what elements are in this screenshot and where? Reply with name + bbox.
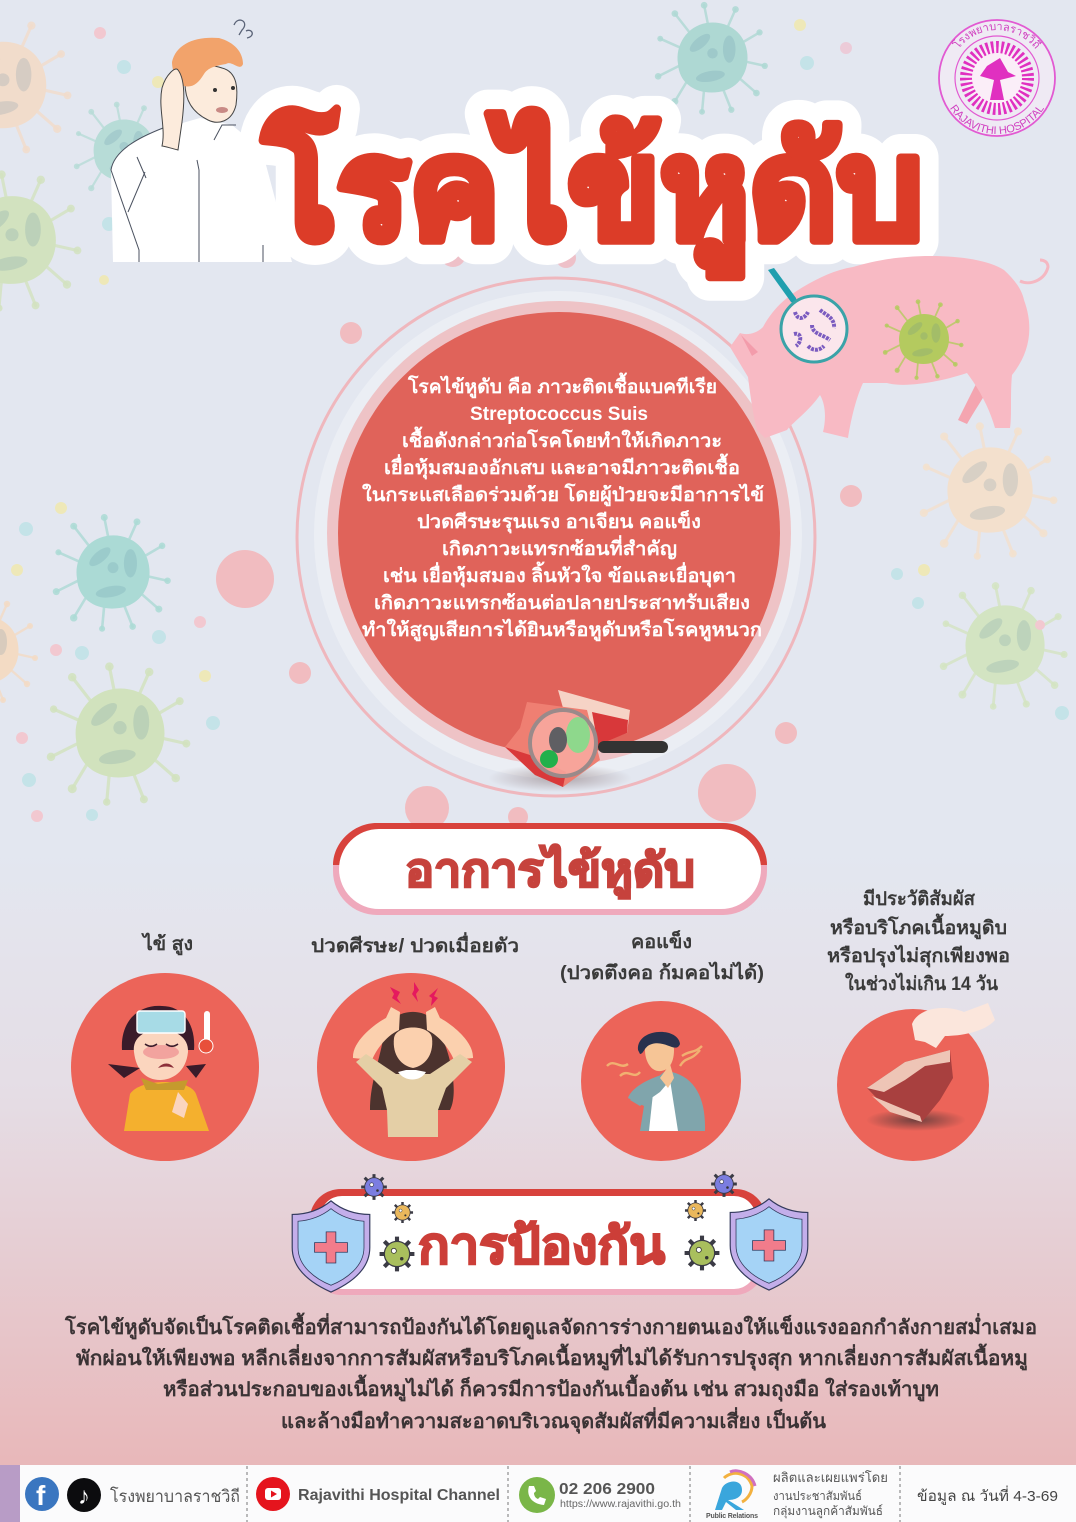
prevention paragraph: และล้างมือทำความสะอาดบริเวณจุดสัมผัสที่มีความเสี่ยง เป็นต้น: [281, 1406, 826, 1434]
footer: channel name: Rajavithi Hospital Channel: [298, 1487, 500, 1504]
symptom 2: headache: ปวดศีรษะ/ ปวดเมื่อยตัว: [311, 932, 519, 957]
hospital logo: โรงพยาบาลราชวิถี: [952, 24, 1042, 49]
description text: เกิดภาวะแทรกซ้อนที่สำคัญ: [442, 535, 677, 560]
footer: hospital name: โรงพยาบาลราชวิถี: [110, 1486, 240, 1506]
icon: tiktok: [67, 1478, 101, 1512]
prevention paragraph: หรือส่วนประกอบของเนื้อหมูไม่ได้ ก็ควรมีการป้องกันเบื้องต้น เช่น สวมถุงมือ ใส่รองเท้าบูท: [163, 1374, 939, 1403]
footer: phone and website: https://www.rajavithi.go.th: [560, 1499, 681, 1510]
footer bar: [0, 1465, 1076, 1522]
symptom 4: raw pork contact: หรือบริโภคเนื้อหมูดิบ: [830, 913, 1007, 940]
icon: left shield: [292, 1201, 370, 1292]
symptom 4: raw pork contact: มีประวัติสัมผัส: [863, 888, 975, 910]
icon: facebook: f: [36, 1480, 46, 1511]
description text: เกิดภาวะแทรกซ้อนต่อปลายประสาทรับเสียง: [374, 592, 750, 614]
title: disease name: โรคไข้หูดับ: [262, 109, 923, 277]
prevention paragraph: [64, 1312, 1037, 1434]
footer: produced by: กลุ่มงานลูกค้าสัมพันธ์: [773, 1504, 883, 1519]
icon: tiktok: ♪: [78, 1483, 90, 1510]
symptom 3: stiff neck: คอแข็ง: [631, 929, 692, 953]
symptom 1: fever: [71, 932, 259, 1161]
illustration: pig with bacteria: [730, 256, 1048, 438]
symptom 3: stiff neck: [560, 929, 764, 1161]
heading banner: prevention: การป้องกัน: [418, 1218, 665, 1274]
hospital logo: RAJAVITHI HOSPITAL: [950, 104, 1044, 134]
description text: ในกระแสเลือดร่วมด้วย โดยผู้ป่วยจะมีอาการไข้: [362, 483, 764, 507]
prevention paragraph: พักผ่อนให้เพียงพอ หลีกเลี่ยงจากการสัมผัสหรือบริโภคเนื้อหมูที่ไม่ได้รับการปรุงสุก หากเลี่ยงการสัมผัสเนื้อหมู: [76, 1343, 1028, 1372]
illustration: meat under magnifier: [488, 690, 662, 792]
icon: right shield: [730, 1199, 808, 1290]
symptom 3: stiff neck: (ปวดตึงคอ ก้มคอไม่ได้): [560, 961, 764, 984]
footer: phone and website: [559, 1481, 681, 1510]
icon: phone: [519, 1477, 555, 1513]
hospital logo: [938, 19, 1056, 137]
footer: phone and website: 02 206 2900: [559, 1481, 655, 1498]
description text: ปวดศีรษะรุนแรง อาเจียน คอแข็ง: [417, 509, 701, 534]
description text: [362, 372, 764, 642]
title: disease name: โรคไข้หูดับ: [262, 109, 923, 277]
icon: facebook: [25, 1477, 59, 1511]
prevention paragraph: โรคไข้หูดับจัดเป็นโรคติดเชื้อที่สามารถป้องกันได้โดยดูแลจัดการร่างกายตนเองให้แข็งแรงออกกำลังกายสม่ำเสมอ: [64, 1312, 1037, 1341]
symptom 4: raw pork contact: หรือปรุงไม่สุกเพียงพอ: [827, 944, 1010, 968]
heading banner: prevention: [292, 1171, 808, 1295]
heading pill: symptoms: [333, 823, 767, 915]
icon: germs: [361, 1171, 737, 1271]
footer: produced by: [773, 1470, 888, 1519]
heading pill: symptoms: อาการไข้หูดับ: [405, 844, 695, 899]
footer: produced by: ผลิตและเผยแพร่โดย: [773, 1470, 888, 1485]
footer: data date: ข้อมูล ณ วันที่ 4-3-69: [917, 1485, 1058, 1505]
symptom 4: raw pork contact: ในช่วงไม่เกิน 14 วัน: [845, 972, 998, 995]
description text: ทำให้สูญเสียการได้ยินหรือหูดับหรือโรคหูหนวก: [362, 618, 762, 642]
icon: public relations logo: [706, 1471, 758, 1520]
main circle panel: [297, 278, 815, 796]
icon: public relations logo: Public Relations: [706, 1513, 758, 1520]
symptom 4: raw pork contact: [827, 888, 1010, 1161]
description text: เช่น เยื่อหุ้มสมอง ลิ้นหัวใจ ข้อและเยื่อบุตา: [383, 561, 736, 588]
description text: เยื่อหุ้มสมองอักเสบ และอาจมีภาวะติดเชื้อ: [384, 453, 740, 480]
description text: เชื้อดังกล่าวก่อโรคโดยทำให้เกิดภาวะ: [402, 426, 722, 452]
description text: โรคไข้หูดับ คือ ภาวะติดเชื้อแบคทีเรีย: [407, 372, 717, 399]
background viruses and dots: [0, 2, 1069, 830]
description text: Streptococcus Suis: [470, 404, 648, 425]
footer: produced by: งานประชาสัมพันธ์: [773, 1489, 862, 1503]
illustration: confused man holding ear: [111, 20, 292, 262]
symptom 1: fever: ไข้ สูง: [141, 932, 193, 956]
icon: youtube: [256, 1477, 290, 1511]
symptom 2: headache: [311, 932, 519, 1161]
